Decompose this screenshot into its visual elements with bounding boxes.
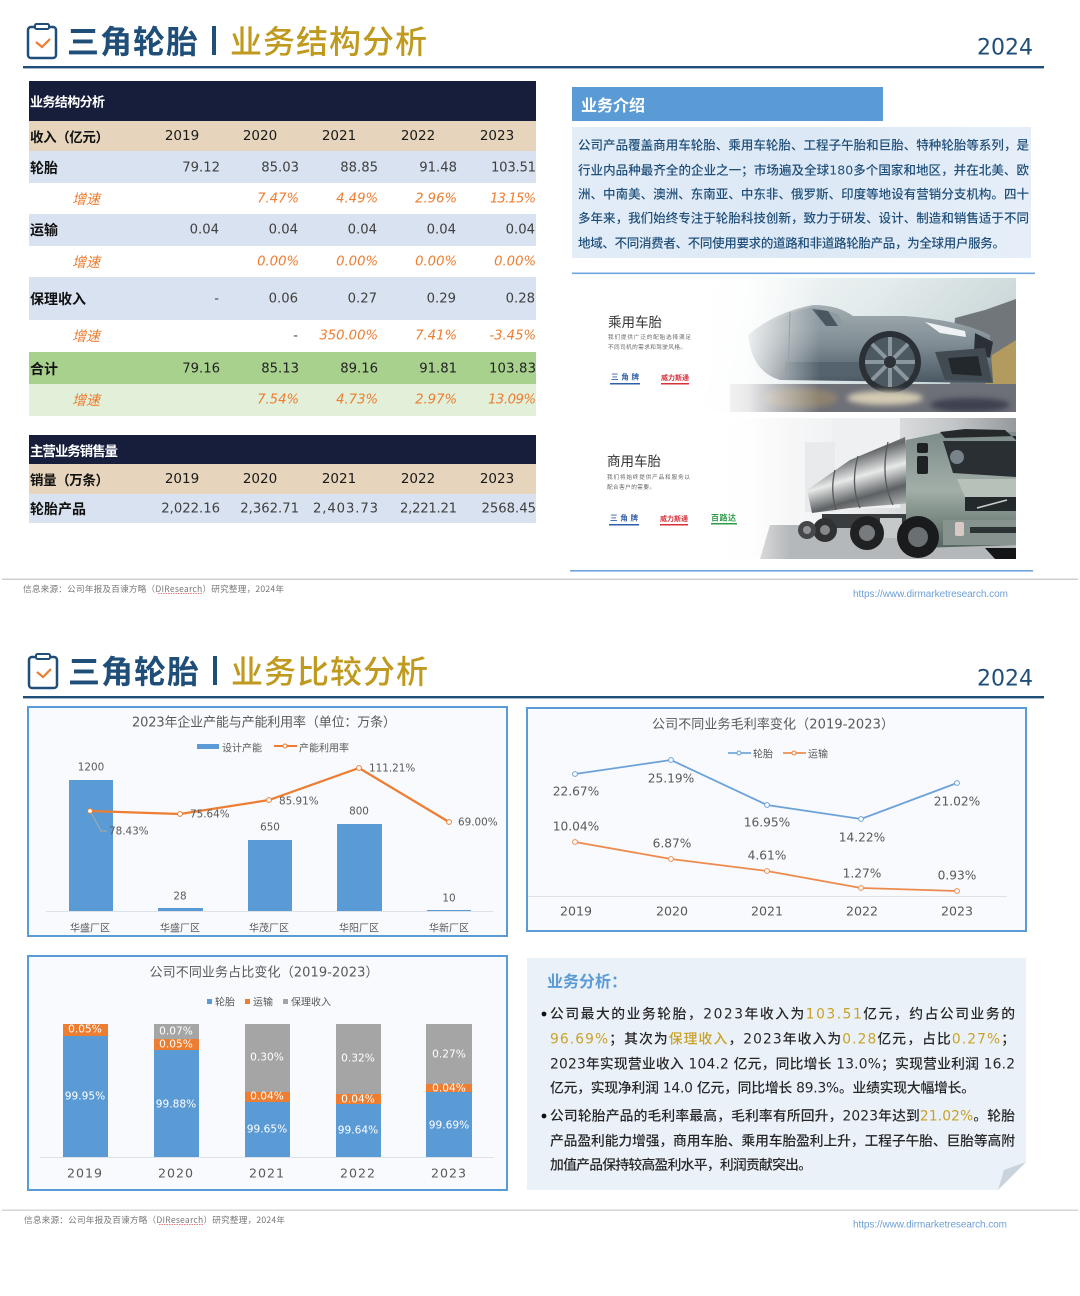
analysis paragraph two: 产品盈利能力增强，商用车胎、乘用车胎盈利上升，工程子午胎、巨胎等高附: [550, 1132, 1015, 1150]
sales table heading bar: 主营业务销售量: [30, 440, 118, 460]
sales table header row: 2023: [480, 471, 514, 487]
row: factoring growth: 7.41%: [415, 328, 457, 344]
intro text block: 地域、不同消费者、不同使用要求的道路和非道路轮胎产品，为全球用户服务。: [578, 236, 1005, 250]
row: tire product sales: 轮胎产品: [30, 499, 86, 519]
row: factoring growth: 350.00%: [319, 328, 378, 344]
row: total growth: 4.73%: [336, 392, 378, 408]
row: total growth: 2.97%: [415, 392, 457, 408]
x axis years: 2021: [751, 904, 783, 918]
x axis years: 2023: [941, 904, 973, 918]
analysis paragraph two: 加值产品保持较高盈利水平，利润贡献突出。: [550, 1156, 812, 1174]
chart: business share stacked bars: [28, 956, 507, 1190]
legend: 保理收入: [291, 994, 331, 1008]
x axis years: 2019: [560, 904, 592, 918]
table header row: 2023: [480, 128, 514, 144]
x axis labels: 华新厂区: [429, 920, 469, 934]
row: transport growth: 增速: [72, 252, 102, 272]
legend: 运输: [253, 994, 273, 1008]
stacked bar 2019: 0.05%: [68, 1024, 102, 1036]
legend: [207, 994, 331, 1008]
row: transport growth: 0.00%: [336, 254, 378, 270]
analysis paragraph one: 亿元，实现净利润 14.0 亿元，同比增长 89.3%。业绩实现大幅增长。: [550, 1080, 975, 1096]
panel: business introduction: [572, 87, 1035, 274]
intro heading: 业务介绍: [581, 92, 645, 116]
text: passenger car tire description: [608, 333, 691, 351]
analysis paragraph two: 公司轮胎产品的毛利率最高，毛利率有所回升，2023年达到21.02%。轮胎: [550, 1108, 1015, 1124]
x axis labels: 华盛厂区: [160, 920, 200, 934]
legend: 运输: [808, 746, 828, 760]
panel: commercial vehicle tires: [607, 418, 1016, 559]
transport value labels: [553, 820, 976, 882]
text: passenger car tire description: 不同司机的需求和驾驶风格。: [608, 343, 686, 351]
row: tire product sales: 2,022.16: [161, 502, 220, 516]
intro text block: 行业内品种最齐全的企业之一；市场遍及全球180多个国家和地区，并在北美、欧: [578, 162, 1029, 178]
transport value labels: 4.61%: [748, 848, 786, 862]
stacked bar 2023: 0.04%: [432, 1082, 466, 1094]
website url: https://www.dirmarketresearch.com: [853, 589, 1008, 600]
line: tire margin: [573, 758, 959, 821]
legend: 轮胎: [215, 994, 235, 1008]
tire value labels: [553, 772, 980, 844]
header: business comparison page: [23, 647, 1044, 698]
row: total revenue: [29, 352, 536, 384]
row: factoring growth: -: [293, 328, 298, 344]
row: transport revenue: 0.04: [427, 222, 456, 238]
table header row: [29, 121, 536, 151]
tire value labels: 14.22%: [839, 830, 885, 844]
chart title: 2023年企业产能与产能利用率（单位：万条）: [132, 714, 396, 730]
analysis paragraph one: [542, 1006, 1015, 1096]
row: total growth: 7.54%: [257, 392, 299, 408]
row: tire revenue: 91.48: [419, 160, 457, 176]
x axis labels: 华阳厂区: [339, 920, 379, 934]
x axis labels: 华盛厂区: [70, 920, 110, 934]
chart: capacity and utilization: [28, 707, 507, 936]
row: tire growth: [72, 189, 536, 209]
legend: 产能利用率: [299, 740, 349, 754]
row: factoring revenue: 0.28: [506, 292, 535, 306]
row: factoring revenue: -: [214, 292, 219, 306]
title: company name: 三角轮胎: [68, 647, 199, 693]
row: tire growth: 7.47%: [257, 192, 299, 206]
row: total revenue: 103.83: [489, 362, 536, 376]
row: transport growth: [72, 252, 536, 272]
bar value labels: 650: [260, 822, 280, 834]
page fold corner: [998, 1162, 1026, 1190]
row: transport revenue: 0.04: [190, 222, 219, 238]
row: total growth: [29, 384, 536, 416]
row: tire revenue: [29, 151, 536, 183]
logo: red brand: 威力斯通: [661, 373, 689, 383]
row: factoring revenue: [29, 277, 536, 320]
title: business structure analysis: 业务结构分析: [230, 17, 427, 63]
table heading bar: [29, 81, 536, 121]
line value labels: 85.91%: [279, 796, 319, 808]
logo: triangle: 三角牌: [610, 512, 638, 524]
table: main business sales volume: [29, 435, 536, 523]
row: factoring growth: [72, 326, 536, 346]
table heading bar: 业务结构分析: [30, 92, 105, 110]
transport value labels: 6.87%: [653, 836, 691, 850]
x axis years: 2022: [340, 1166, 376, 1180]
row: transport revenue: 0.04: [348, 222, 377, 238]
bar value labels: 10: [442, 892, 456, 904]
intro heading: [572, 87, 883, 121]
row: tire product sales: 2568.45: [481, 502, 536, 516]
line value labels: 111.21%: [369, 762, 415, 774]
row: tire revenue: 103.51: [491, 160, 536, 176]
sales table header row: 2022: [401, 471, 435, 487]
tire value labels: 16.95%: [744, 816, 790, 830]
stacked bar 2020: 0.07%: [159, 1026, 193, 1038]
x axis labels: [70, 920, 469, 934]
stacked bar 2020: 0.05%: [159, 1038, 193, 1050]
row: transport growth: 0.00%: [257, 254, 299, 270]
row: tire product sales: 2,221.21: [400, 502, 457, 516]
stacked bar 2021: [245, 1024, 290, 1157]
row: total growth: 增速: [72, 390, 102, 410]
x axis years: 2020: [656, 904, 688, 918]
title separator: [212, 26, 216, 55]
logo: red brand: 威力斯通: [660, 514, 688, 524]
text: commercial tire heading: 商用车胎: [607, 450, 662, 470]
text: passenger car tire heading: 乘用车胎: [608, 311, 662, 331]
row: total revenue: 合计: [30, 359, 58, 379]
table header row: 2022: [401, 128, 435, 144]
transport value labels: 10.04%: [553, 820, 599, 834]
row: tire growth: 2.96%: [415, 192, 457, 206]
analysis paragraph one: 公司最大的业务轮胎，2023年收入为103.51亿元，约占公司业务的: [550, 1006, 1015, 1022]
footer: top page: [2, 578, 1078, 600]
row: tire revenue: 轮胎: [30, 158, 58, 178]
source note: 信息来源：公司年报及百谏方略（DIResearch）研究整理，2024年: [23, 583, 284, 595]
row: factoring revenue: 0.27: [348, 292, 377, 306]
stacked bar 2020: [154, 1024, 199, 1157]
row: transport growth: 0.00%: [494, 254, 536, 270]
legend: [728, 746, 828, 760]
table header row: 2020: [243, 128, 277, 144]
title separator: [213, 656, 217, 685]
x axis years: 2021: [249, 1166, 285, 1180]
row: tire growth: 4.49%: [336, 192, 378, 206]
row: factoring growth: 增速: [72, 326, 102, 346]
illustration: sports car: [700, 278, 1016, 412]
table header row: 收入（亿元）: [30, 126, 109, 146]
stacked bar 2023: [426, 1024, 472, 1157]
row: tire revenue: 79.12: [182, 160, 220, 176]
analysis paragraph two: [542, 1108, 1015, 1174]
row: factoring revenue: 0.29: [427, 292, 456, 306]
row: tire product sales: [29, 494, 536, 523]
year label: 2024: [977, 36, 1033, 60]
panel: business analysis: [527, 958, 1026, 1190]
title: company name: 三角轮胎: [67, 17, 198, 63]
row: total revenue: 91.81: [419, 362, 457, 376]
text: commercial tire description: [607, 473, 690, 491]
row: total revenue: 79.16: [182, 362, 220, 376]
row: factoring revenue: 0.06: [269, 292, 298, 306]
bar value labels: [78, 762, 456, 904]
row: factoring revenue: 保理收入: [30, 289, 86, 309]
row: tire revenue: 88.85: [340, 160, 378, 176]
logo: green brand: 百路达: [711, 512, 736, 524]
bar value labels: 800: [349, 806, 369, 818]
sales table header row: 2019: [165, 471, 199, 487]
line: transport margin: [573, 840, 959, 893]
stacked bar 2020: 99.88%: [156, 1098, 196, 1110]
stacked bar 2023: 99.69%: [429, 1120, 469, 1132]
text: passenger car tire description: 我们提供广泛的配胎选择满足: [608, 333, 691, 341]
row: tire revenue: 85.03: [261, 160, 299, 176]
text: commercial tire description: 配合客户的需要。: [607, 483, 655, 491]
stacked bar 2021: 0.04%: [250, 1090, 284, 1102]
intro text block: 洲、中南美、澳洲、东南亚、中东非、俄罗斯、印度等地设有营销分支机构。四十: [578, 186, 1029, 202]
sales table header row: 销量（万条）: [30, 469, 109, 489]
panel: passenger car tires: [608, 278, 1016, 412]
row: tire growth: 增速: [72, 189, 102, 209]
analysis heading: 业务分析：: [547, 968, 627, 992]
line value labels: 75.64%: [190, 808, 230, 820]
tire value labels: 21.02%: [934, 794, 980, 808]
row: transport revenue: 0.04: [506, 222, 535, 238]
stacked bar 2022: 0.04%: [341, 1094, 375, 1106]
intro text block: 公司产品覆盖商用车轮胎、乘用车轮胎、工程子午胎和巨胎、特种轮胎等系列，是: [578, 138, 1029, 152]
legend: 轮胎: [753, 746, 773, 760]
row: transport growth: 0.00%: [415, 254, 457, 270]
line: utilization rate: [88, 766, 451, 831]
footer: bottom page: [2, 1210, 1078, 1230]
x axis years: 2023: [431, 1166, 467, 1180]
legend: 设计产能: [222, 740, 262, 754]
tire value labels: 22.67%: [553, 784, 599, 798]
tire value labels: 25.19%: [648, 772, 694, 786]
row: tire product sales: 2,362.71: [240, 502, 299, 516]
stacked bar 2022: 99.64%: [338, 1124, 378, 1136]
table header row: 2019: [165, 128, 199, 144]
row: total revenue: 89.16: [340, 362, 378, 376]
sales table header row: 2021: [322, 471, 356, 487]
table: business structure analysis: [29, 81, 536, 416]
stacked bar 2022: [336, 1024, 381, 1157]
stacked bar 2023: 0.27%: [432, 1048, 466, 1060]
table header row: 2021: [322, 128, 356, 144]
x axis years: [67, 1166, 467, 1180]
stacked bar 2022: 0.32%: [341, 1052, 375, 1064]
year label: 2024: [977, 666, 1033, 692]
sales table header row: 2020: [243, 471, 277, 487]
sales table heading bar: [29, 435, 536, 464]
row: tire growth: 13.15%: [490, 192, 536, 206]
sales table header row: [29, 464, 536, 494]
stacked bar 2021: 0.30%: [250, 1052, 284, 1064]
source note: 信息来源：公司年报及百谏方略（DIResearch）研究整理，2024年: [24, 1214, 285, 1226]
stacked bar 2021: 99.65%: [247, 1124, 287, 1136]
row: transport revenue: 运输: [30, 220, 58, 240]
x axis years: [560, 904, 973, 918]
line value labels: 78.43%: [109, 826, 149, 838]
analysis paragraph one: 2023年实现营业收入 104.2 亿元，同比增长 13.0%；实现营业利润 16.2: [550, 1056, 1015, 1072]
title: business comparison analysis: 业务比较分析: [231, 647, 428, 693]
row: tire product sales: 2,403.73: [313, 502, 378, 516]
analysis paragraph one: 96.69%；其次为保理收入，2023年收入为0.28亿元，占比0.27%；: [550, 1030, 1015, 1048]
x axis years: 2019: [67, 1166, 103, 1180]
intro text block: 多年来，我们始终专注于轮胎科技创新，致力于研发、设计、制造和销售适于不同: [578, 210, 1029, 226]
logo: triangle: 三角牌: [611, 372, 640, 382]
row: transport revenue: [29, 214, 536, 246]
x axis labels: 华茂厂区: [249, 920, 289, 934]
stacked bar 2019: [63, 1024, 108, 1157]
stacked bar 2019: 99.95%: [65, 1090, 105, 1102]
row: factoring growth: -3.45%: [489, 328, 536, 344]
legend: [197, 740, 349, 754]
row: transport revenue: 0.04: [269, 222, 298, 238]
intro text block: [572, 127, 1031, 258]
chart: gross margin by business: [527, 708, 1026, 931]
header: business structure page: [23, 17, 1044, 68]
bar value labels: 28: [173, 890, 187, 902]
icon: clipboard check: [28, 24, 56, 58]
line value labels: [109, 762, 498, 838]
chart title: 公司不同业务毛利率变化（2019-2023）: [652, 716, 894, 732]
line value labels: 69.00%: [458, 816, 498, 828]
text: commercial tire description: 我们将始终提供产品和服务以: [607, 473, 690, 481]
bars: design capacity: [69, 780, 471, 911]
row: total growth: 13.09%: [488, 392, 536, 408]
chart title: 公司不同业务占比变化（2019-2023）: [150, 964, 378, 980]
icon: clipboard check: [29, 654, 57, 688]
bar value labels: 1200: [78, 762, 104, 774]
transport value labels: 1.27%: [843, 866, 881, 880]
x axis years: 2020: [158, 1166, 194, 1180]
website url: https://www.dirmarketresearch.com: [853, 1220, 1007, 1230]
x axis years: 2022: [846, 904, 878, 918]
transport value labels: 0.93%: [938, 868, 976, 882]
illustration: tanker truck: [760, 418, 1016, 559]
row: total revenue: 85.13: [261, 362, 299, 376]
